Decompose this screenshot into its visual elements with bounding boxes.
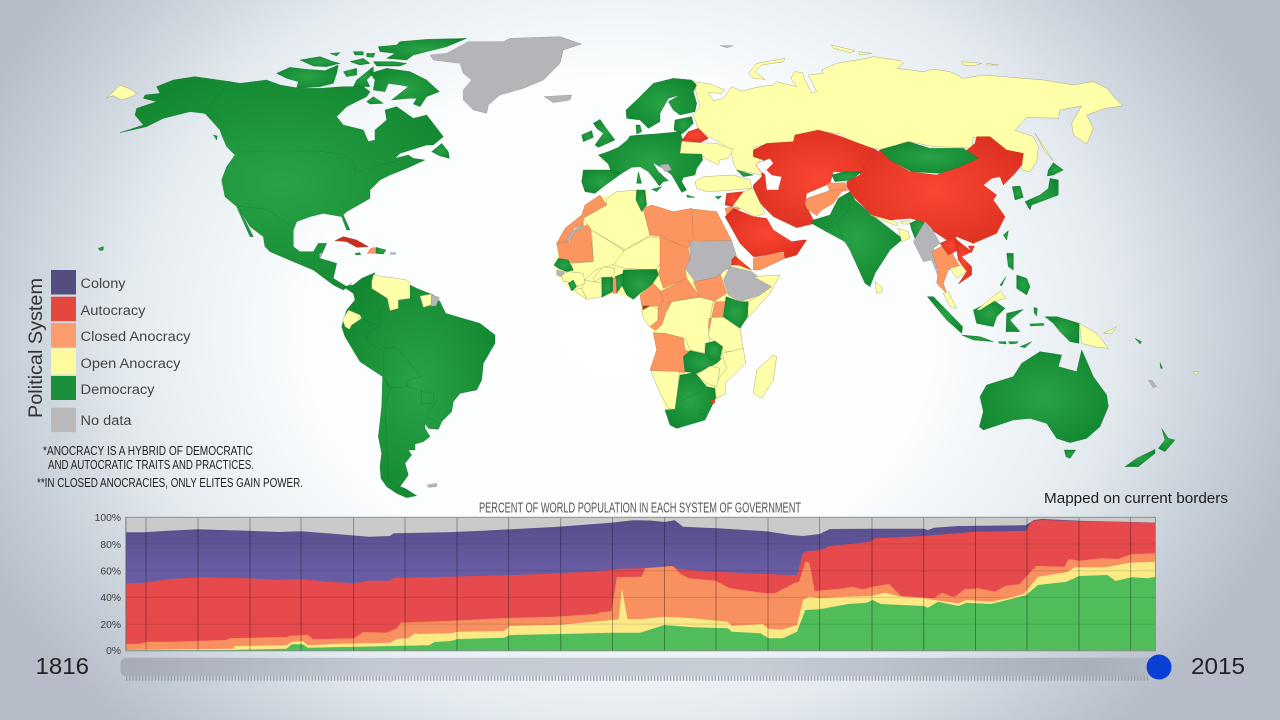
Pacific islands [1135, 338, 1198, 388]
Laos [940, 237, 962, 255]
Egypt [692, 209, 732, 241]
Equatorial Guinea [643, 306, 649, 310]
map: East Asia and Oceania [847, 137, 1198, 467]
Vietnam [955, 238, 972, 284]
Pakistan and India [812, 192, 902, 287]
South Sudan [693, 273, 727, 302]
Nepal [870, 213, 898, 226]
United Kingdom [593, 119, 615, 147]
Yemen [753, 252, 785, 270]
Kenya [723, 297, 748, 328]
Venezuela [372, 275, 410, 311]
Myanmar [913, 222, 940, 277]
y axis labels: 60% [100, 566, 121, 578]
legend: no data [51, 408, 132, 432]
legend: autocracy [51, 297, 146, 321]
Taiwan [1003, 231, 1008, 240]
footnotes [37, 444, 303, 490]
Baltic states [674, 117, 693, 134]
Sri Lanka [875, 282, 883, 293]
Greenland [430, 37, 582, 113]
legend: colony [51, 270, 126, 294]
continent in green [342, 273, 495, 498]
Libya [643, 205, 693, 248]
Namibia [651, 371, 679, 410]
legend: democracy: Democracy [80, 382, 155, 397]
Georgia [737, 170, 753, 177]
continental Europe [598, 132, 703, 192]
map: North America [98, 37, 582, 290]
Canada, USA, Mexico and Central America [120, 77, 443, 290]
internal borders [357, 285, 438, 487]
French Guiana [431, 295, 439, 306]
legend: no data: No data [80, 413, 132, 428]
Madagascar [753, 355, 777, 398]
Nigeria [622, 269, 658, 299]
map: Russia [693, 45, 1123, 175]
Uganda [712, 302, 726, 317]
Mongolia [880, 142, 978, 173]
area: closed anocracy [126, 553, 1156, 651]
Mauritania [557, 223, 593, 263]
Tanzania [708, 317, 743, 352]
chart title: PERCENT OF WORLD POPULATION IN EACH SYSTEM OF GOVERNMENT [479, 500, 801, 516]
slider track [120, 658, 1160, 676]
Central African Republic [660, 278, 700, 303]
Cameroon [640, 283, 663, 306]
Chad [658, 237, 690, 288]
Papua New Guinea [1079, 323, 1108, 348]
Ghana [602, 277, 613, 297]
Kyrgyzstan [832, 172, 862, 182]
legend: democracy [51, 376, 155, 400]
Australia [979, 350, 1108, 443]
Tasmania [1064, 450, 1076, 458]
slider handle [1146, 654, 1172, 680]
Guinea [562, 272, 585, 287]
anocracy note line 2: AND AUTOCRATIC TRAITS AND PRACTICES. [48, 458, 254, 472]
Benin [615, 273, 623, 293]
Denmark [636, 125, 642, 134]
Mozambique [713, 348, 746, 398]
Scandinavia [626, 78, 697, 128]
Tunisia [636, 190, 647, 212]
Ukraine [680, 142, 733, 165]
Liberia [573, 288, 587, 299]
stacked area chart [95, 513, 1156, 657]
legend: autocracy: Autocracy [80, 303, 146, 318]
Ireland [582, 131, 593, 142]
Togo [613, 278, 617, 293]
Cambodia [950, 265, 967, 278]
Ethiopia and Somaliland [723, 267, 772, 302]
Ecuador [343, 310, 362, 329]
Burkina Faso [593, 267, 615, 282]
internal borders [204, 82, 400, 228]
end year: 2015 [1191, 653, 1245, 679]
Indonesia [927, 297, 1079, 348]
Philippines [1000, 253, 1030, 295]
Saudi Arabia and Oman [725, 208, 807, 258]
Chukotka tip [107, 85, 137, 100]
Bangladesh [898, 228, 910, 242]
Jordan [725, 207, 740, 217]
Malaysia [943, 292, 957, 308]
Morocco and Western Sahara [557, 195, 607, 243]
Senegal [554, 258, 573, 272]
area: open anocracy [126, 562, 1156, 651]
Zambia [683, 351, 722, 373]
map: Africa [554, 190, 780, 428]
Turkey [695, 175, 752, 192]
New Zealand [1125, 428, 1175, 467]
Arctic islands of Russia [720, 45, 1053, 161]
DR Congo [653, 297, 713, 353]
Bosnia [660, 164, 672, 172]
Eritrea [732, 256, 752, 270]
start year: 1816 [36, 653, 89, 679]
y axis labels: 20% [100, 620, 121, 631]
Western Sahara strip [565, 225, 583, 242]
New Britain [1103, 327, 1117, 333]
Niger [613, 237, 662, 270]
slider ticks [126, 676, 1148, 681]
Sudan [685, 241, 737, 282]
area: colony [126, 519, 1156, 651]
Tajikistan [827, 183, 847, 191]
y axis labels [95, 513, 121, 657]
North-east India [910, 217, 930, 238]
Afghanistan [805, 185, 848, 216]
Botswana border and Lesotho [680, 388, 705, 415]
legend: open anocracy: Open Anocracy [80, 356, 181, 371]
y axis labels: 80% [100, 540, 121, 551]
Somalia [747, 275, 780, 317]
legend: colony: Colony [80, 276, 126, 291]
Borneo Malaysia [977, 291, 1006, 310]
Mediterranean islands [637, 172, 722, 199]
area: autocracy [126, 520, 1156, 651]
Guinea-Bissau [557, 270, 565, 277]
Rwanda and Burundi [708, 318, 713, 328]
Congo [650, 302, 672, 330]
closed anocracy note: **IN CLOSED ANOCRACIES, ONLY ELITES GAIN POWER. [37, 476, 303, 490]
Sierra Leone [568, 280, 577, 291]
borders note: Mapped on current borders [1044, 491, 1228, 507]
legend: open anocracy [51, 348, 181, 374]
Botswana and South Africa [665, 373, 716, 428]
Falkland Islands [427, 483, 437, 487]
y axis labels: 0% [106, 646, 121, 657]
Japan [1025, 163, 1063, 210]
area: no data [126, 517, 1156, 651]
Syria [725, 192, 743, 207]
map: South America [342, 273, 495, 498]
Arctic islands [98, 38, 467, 251]
Cuba [335, 237, 368, 247]
Iraq [733, 188, 765, 217]
Bhutan [900, 221, 909, 224]
Africa base landmass [554, 190, 780, 428]
South Korea [1012, 186, 1023, 200]
chart gridlines [126, 517, 1131, 651]
Mali [572, 230, 625, 280]
Gabon [642, 306, 658, 327]
Suriname [420, 294, 432, 307]
Ivory Coast [582, 280, 602, 299]
Northern Zambia [705, 341, 723, 360]
map: Europe and Middle East [582, 78, 930, 293]
anocracy note line 1: *ANOCRACY IS A HYBRID OF DEMOCRATIC [43, 444, 253, 458]
legend: closed anocracy [51, 323, 191, 348]
world map [98, 37, 1198, 498]
Thailand [932, 243, 960, 293]
chart frame [126, 517, 1156, 651]
Hainan [968, 246, 974, 253]
y axis labels: 40% [100, 593, 121, 604]
Iberia [582, 170, 622, 193]
Angola [650, 333, 690, 373]
timeline slider [36, 653, 1245, 680]
Central Asia and Iran [753, 130, 883, 228]
area: democracy [126, 575, 1156, 651]
Algeria [583, 190, 650, 250]
Iceland [544, 95, 572, 103]
Swaziland [711, 399, 715, 403]
legend [26, 270, 191, 432]
Pakistan border [837, 197, 850, 243]
Caspian Sea [757, 158, 782, 190]
Caribbean islands [319, 247, 396, 259]
y axis labels: 100% [95, 513, 121, 524]
Belarus [682, 128, 708, 143]
China and North Korea [847, 137, 1023, 243]
Zimbabwe [697, 366, 720, 387]
Russia [693, 57, 1123, 175]
legend: closed anocracy: Closed Anocracy [80, 329, 191, 344]
legend title: Political System [26, 278, 47, 418]
